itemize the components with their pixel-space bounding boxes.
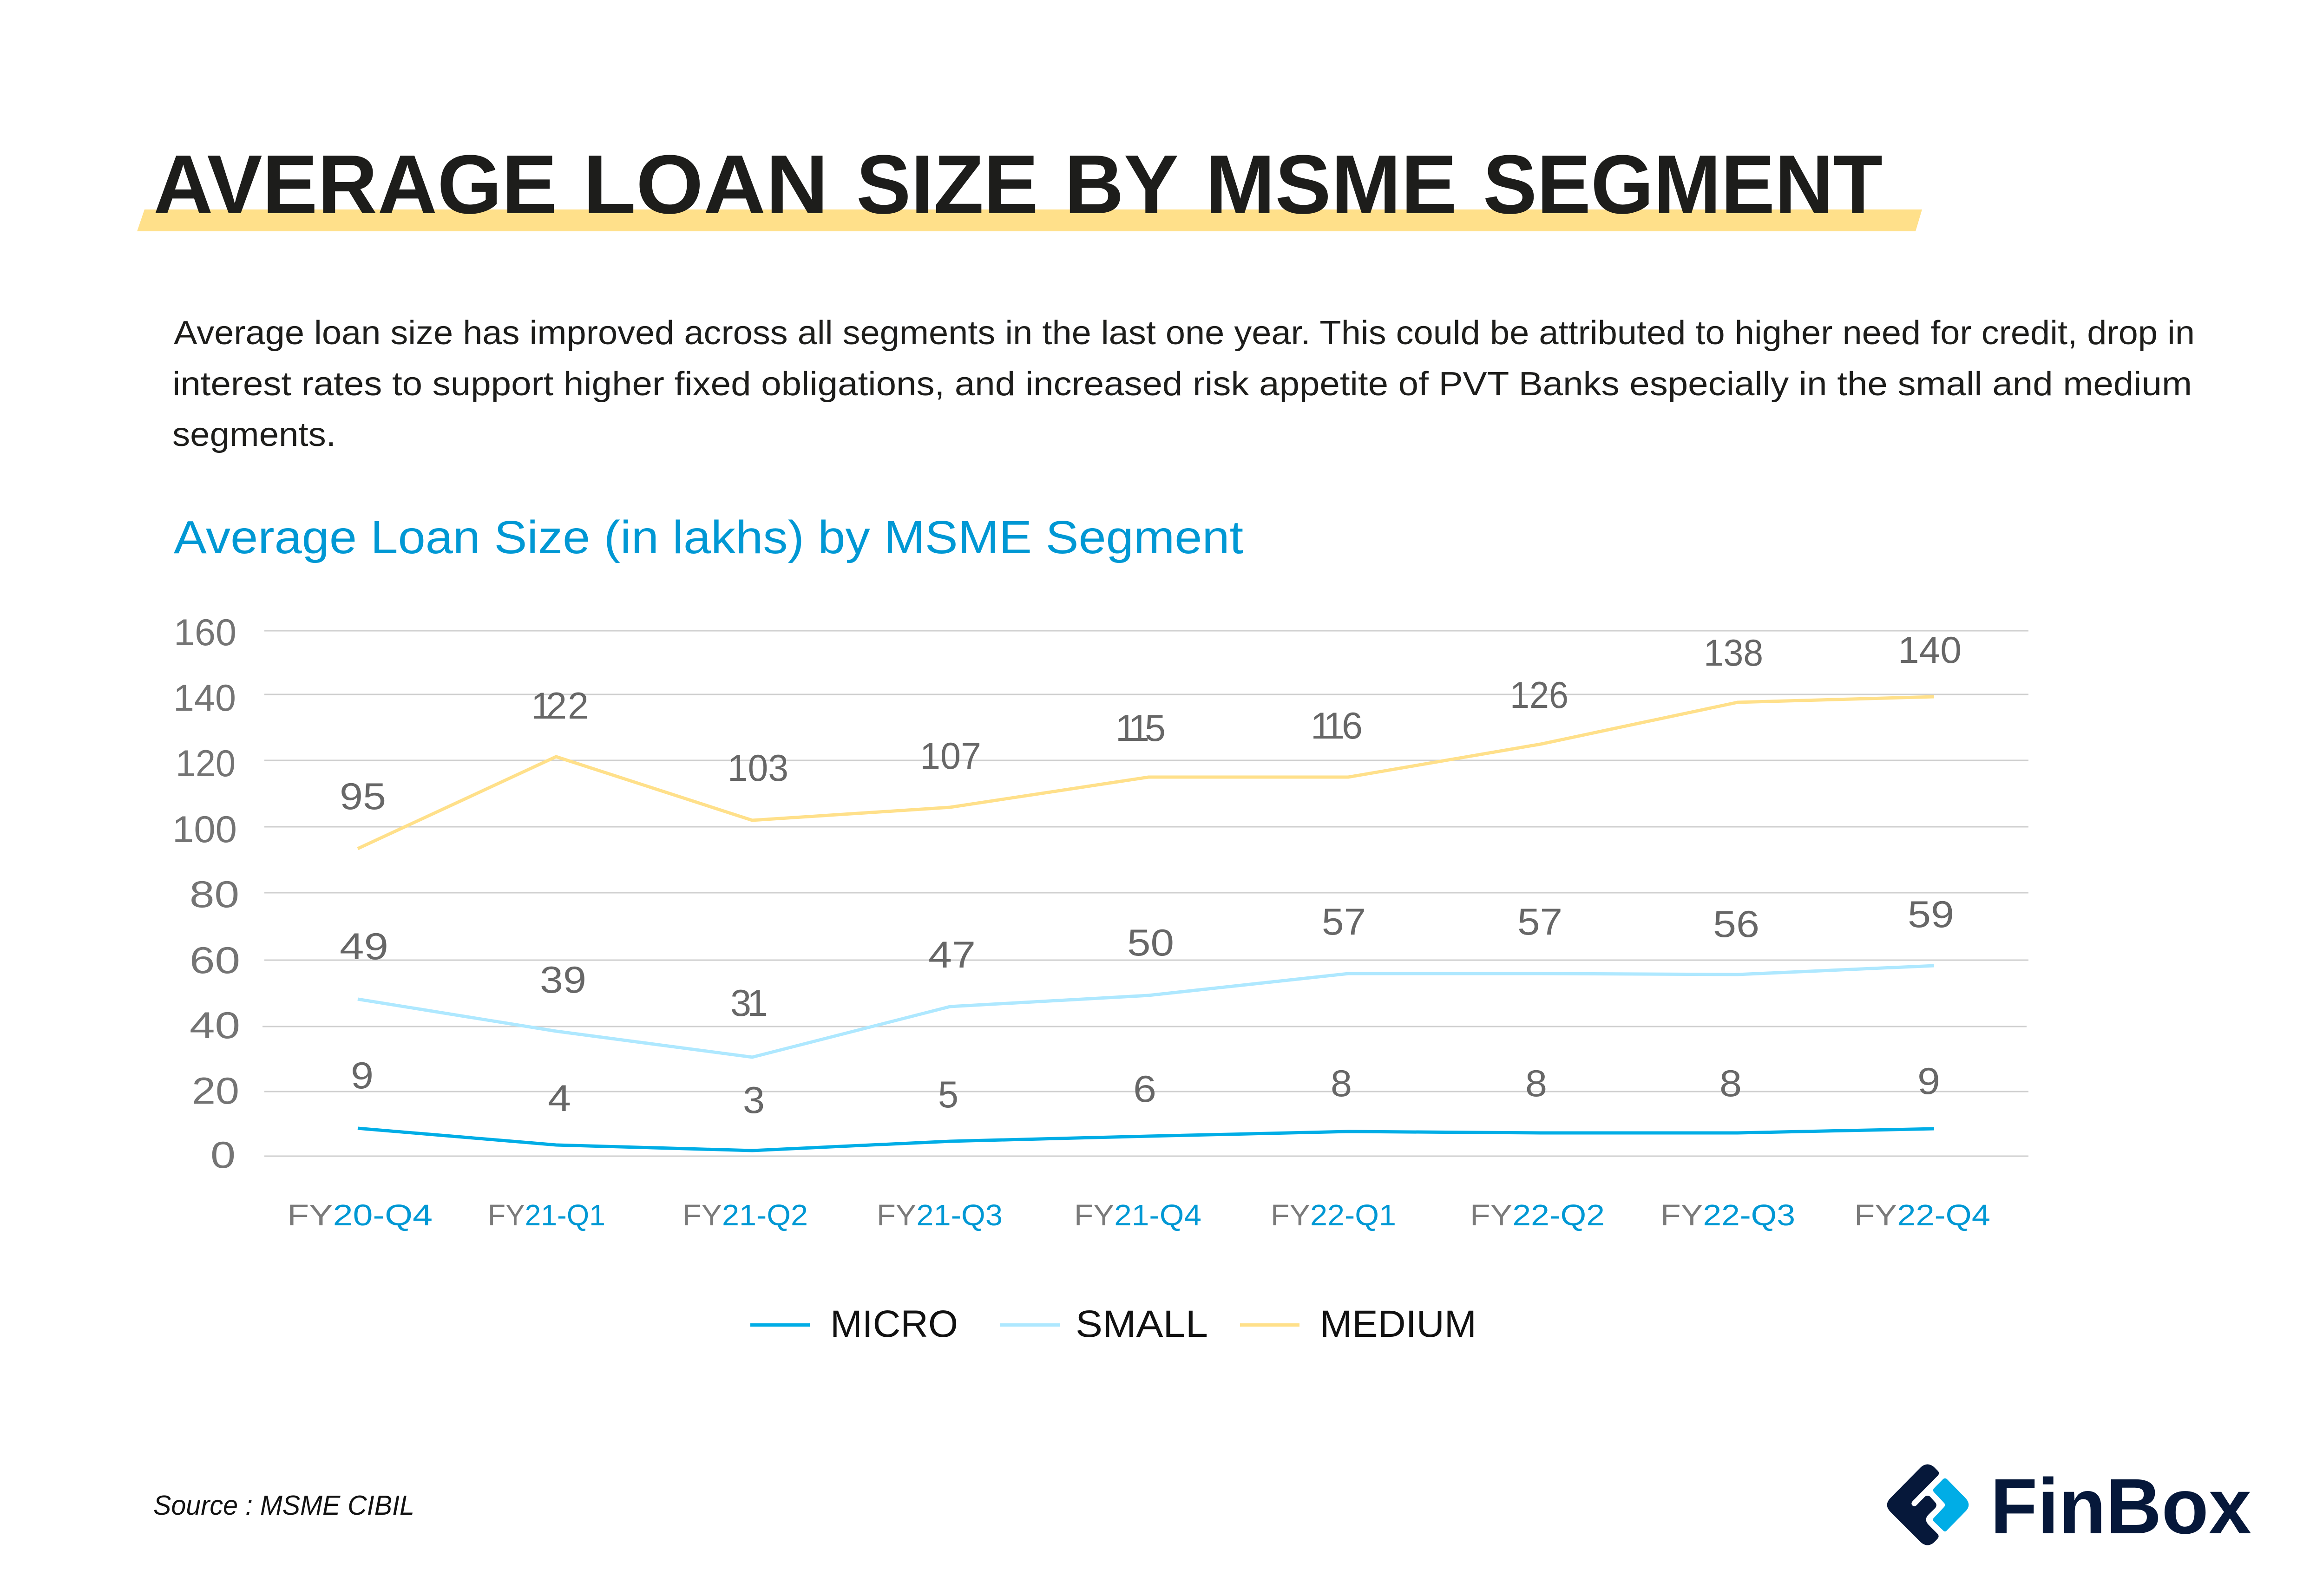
y axis labels bbox=[172, 612, 240, 1176]
x axis labels: FY21-Q2 bbox=[682, 1198, 808, 1232]
data labels: small: 47 bbox=[928, 934, 976, 976]
data labels: medium: 140 bbox=[1898, 629, 1962, 671]
wordmark: FinBox bbox=[1990, 1462, 2251, 1550]
data labels: medium: 107 bbox=[920, 735, 981, 777]
title: AVERAGE bbox=[153, 138, 557, 231]
data labels: small: 50 bbox=[1127, 922, 1174, 964]
data labels: small: 49 bbox=[340, 926, 388, 968]
data labels: medium: 115 bbox=[1116, 707, 1166, 749]
legend bbox=[750, 1303, 1476, 1345]
x axis labels: FY21-Q4 bbox=[1074, 1198, 1201, 1232]
data labels: small: 39 bbox=[540, 959, 586, 1001]
intro paragraph: interest rates to support higher fixed obligations, and increased risk appetite of PVT Banks especially in the small and medium bbox=[172, 366, 2192, 403]
x axis labels: FY22-Q4 bbox=[1854, 1198, 1990, 1232]
x axis labels: FY21-Q3 bbox=[877, 1198, 1003, 1232]
data labels: micro: 4 bbox=[548, 1078, 571, 1119]
data labels: small: 56 bbox=[1713, 903, 1759, 945]
y axis labels: 80 bbox=[190, 874, 239, 916]
title: SIZE bbox=[856, 138, 1038, 231]
x axis labels: FY22-Q2 bbox=[1470, 1198, 1605, 1232]
data labels: micro: 8 bbox=[1719, 1063, 1742, 1105]
intro paragraph: segments. bbox=[172, 416, 336, 453]
line: small bbox=[358, 966, 1934, 1057]
icon: FinBox mark bbox=[1887, 1464, 1969, 1545]
data labels: micro bbox=[351, 1055, 1940, 1121]
legend: SMALL bbox=[1076, 1303, 1208, 1345]
y axis labels: 160 bbox=[174, 612, 236, 654]
data labels: small: 31 bbox=[730, 982, 768, 1024]
x axis labels: FY22-Q3 bbox=[1660, 1198, 1795, 1232]
title: MSME bbox=[1205, 138, 1457, 231]
source note: Source : MSME CIBIL bbox=[153, 1490, 414, 1521]
title: BY bbox=[1064, 138, 1179, 231]
y axis labels: 20 bbox=[192, 1070, 239, 1112]
y axis labels: 140 bbox=[173, 677, 236, 719]
line chart bbox=[172, 612, 2028, 1232]
data labels: medium: 95 bbox=[340, 776, 386, 818]
data labels: medium: 138 bbox=[1704, 632, 1763, 674]
intro paragraph: Average loan size has improved across all segments in the last one year. This could be attributed to higher need for credit, drop in bbox=[174, 314, 2195, 352]
y axis labels: 40 bbox=[190, 1005, 240, 1047]
data labels: micro: 8 bbox=[1525, 1063, 1547, 1105]
title: SEGMENT bbox=[1483, 138, 1883, 231]
data labels: small bbox=[340, 894, 1954, 1024]
y axis labels: 60 bbox=[190, 940, 240, 981]
legend: MEDIUM bbox=[1320, 1303, 1476, 1345]
data labels: small: 57 bbox=[1322, 901, 1366, 943]
data labels: micro: 3 bbox=[743, 1079, 765, 1121]
data labels: small: 57 bbox=[1517, 901, 1562, 943]
line: medium bbox=[358, 697, 1934, 849]
line: micro bbox=[358, 1128, 1934, 1151]
x axis labels: FY22-Q1 bbox=[1271, 1198, 1396, 1232]
data labels: medium: 103 bbox=[728, 747, 788, 789]
intro paragraph bbox=[172, 314, 2195, 453]
data labels: micro: 8 bbox=[1331, 1063, 1352, 1105]
data labels: medium: 116 bbox=[1311, 705, 1363, 747]
chart heading: Average Loan Size (in lakhs) by MSME Segment bbox=[174, 511, 1243, 563]
data labels: small: 59 bbox=[1908, 894, 1954, 935]
y axis labels: 120 bbox=[176, 743, 236, 785]
FinBox logo bbox=[1887, 1462, 2251, 1550]
data labels: medium: 126 bbox=[1510, 674, 1568, 716]
title highlight bar bbox=[137, 209, 1922, 231]
data labels: medium: 122 bbox=[531, 685, 589, 727]
data labels: medium bbox=[340, 629, 1962, 818]
title: LOAN bbox=[583, 138, 828, 231]
data labels: micro: 5 bbox=[938, 1074, 958, 1116]
y axis labels: 0 bbox=[210, 1134, 236, 1176]
title bbox=[153, 138, 1883, 231]
legend: MICRO bbox=[830, 1303, 958, 1345]
data labels: micro: 9 bbox=[351, 1055, 374, 1097]
data labels: micro: 6 bbox=[1133, 1068, 1156, 1110]
x axis labels: FY21-Q1 bbox=[488, 1198, 605, 1232]
data labels: micro: 9 bbox=[1917, 1060, 1940, 1102]
x axis labels: FY 20-Q4 bbox=[287, 1198, 433, 1232]
y axis labels: 100 bbox=[172, 809, 237, 850]
x axis labels bbox=[287, 1198, 1990, 1232]
